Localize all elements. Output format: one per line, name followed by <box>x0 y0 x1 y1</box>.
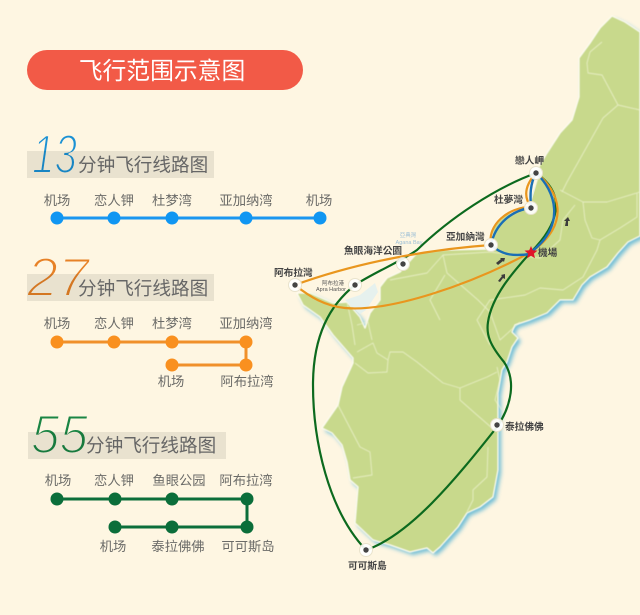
section: 27 minute route: 杜梦湾 <box>152 315 192 331</box>
section: 13 minute route: 杜梦湾 <box>152 192 192 208</box>
section: 27 minute route: 恋人钾 <box>94 315 134 331</box>
section: 13 minute route: 13 <box>32 123 77 185</box>
icon: airport star <box>524 246 538 258</box>
map place labels: 杜夢灣 <box>494 193 523 206</box>
map place labels: 阿布拉港 <box>322 279 344 287</box>
section: 55 minute route: 可可斯岛 <box>221 539 275 554</box>
route: 55 minute green <box>313 173 556 550</box>
section: 13 minute route <box>27 123 332 224</box>
section: 55 minute route: 55 <box>31 403 88 465</box>
section: 55 minute route <box>28 403 275 554</box>
section: 55 minute route: 泰拉佛佛 <box>151 539 205 554</box>
map place labels: 阿布拉灣 <box>274 266 313 279</box>
small map label: Agana Bay: Agana Bay <box>396 240 423 246</box>
section: 27 minute route: 机场 <box>44 316 70 331</box>
section: 13 minute route: 机场 <box>44 193 70 208</box>
section: 55 minute route: 分钟飞行线路图 <box>86 435 216 456</box>
section: 13 minute route: 恋人钾 <box>94 192 134 208</box>
map place labels: 可可斯島 <box>348 559 387 572</box>
map of the island <box>297 16 640 556</box>
map place labels: Apra Harbor <box>316 287 346 293</box>
section: 27 minute route: 分钟飞行线路图 <box>78 278 208 299</box>
section: 13 minute route: 机场 <box>306 193 332 208</box>
title pill <box>27 50 303 90</box>
map place labels: 魚眼海洋公園 <box>344 244 402 257</box>
title pill: 飞行范围示意图 <box>79 58 245 85</box>
section: 55 minute route: 鱼眼公园 <box>152 472 206 488</box>
section: 55 minute route: 机场 <box>100 539 126 554</box>
section: 27 minute route <box>26 246 274 389</box>
section: 27 minute route: 亚加纳湾 <box>219 315 273 331</box>
section: 55 minute route: 机场 <box>45 473 71 488</box>
small map label: Agana Bay: 亞典灣 <box>400 231 417 239</box>
small map label: Agana Bay <box>396 231 423 246</box>
map place labels <box>274 154 558 572</box>
map place labels: 機場 <box>538 246 558 259</box>
section: 13 minute route: 亚加纳湾 <box>219 192 273 208</box>
section: 27 minute route: 阿布拉湾 <box>220 373 274 389</box>
section: 55 minute route: 恋人钾 <box>94 472 134 488</box>
map place labels: 泰拉佛佛 <box>505 420 544 433</box>
map place labels: 戀人岬 <box>515 154 544 167</box>
section: 55 minute route: 阿布拉湾 <box>219 472 273 488</box>
section: 27 minute route: 机场 <box>158 374 184 389</box>
section: 13 minute route: 分钟飞行线路图 <box>78 154 208 176</box>
map direction arrows <box>496 217 570 282</box>
map station markers <box>288 166 542 556</box>
route: 13 minute blue <box>491 173 554 255</box>
map place labels: 亞加納灣 <box>446 230 485 243</box>
section: 27 minute route: 27 <box>26 246 91 308</box>
route: 27 minute orange <box>295 173 558 308</box>
